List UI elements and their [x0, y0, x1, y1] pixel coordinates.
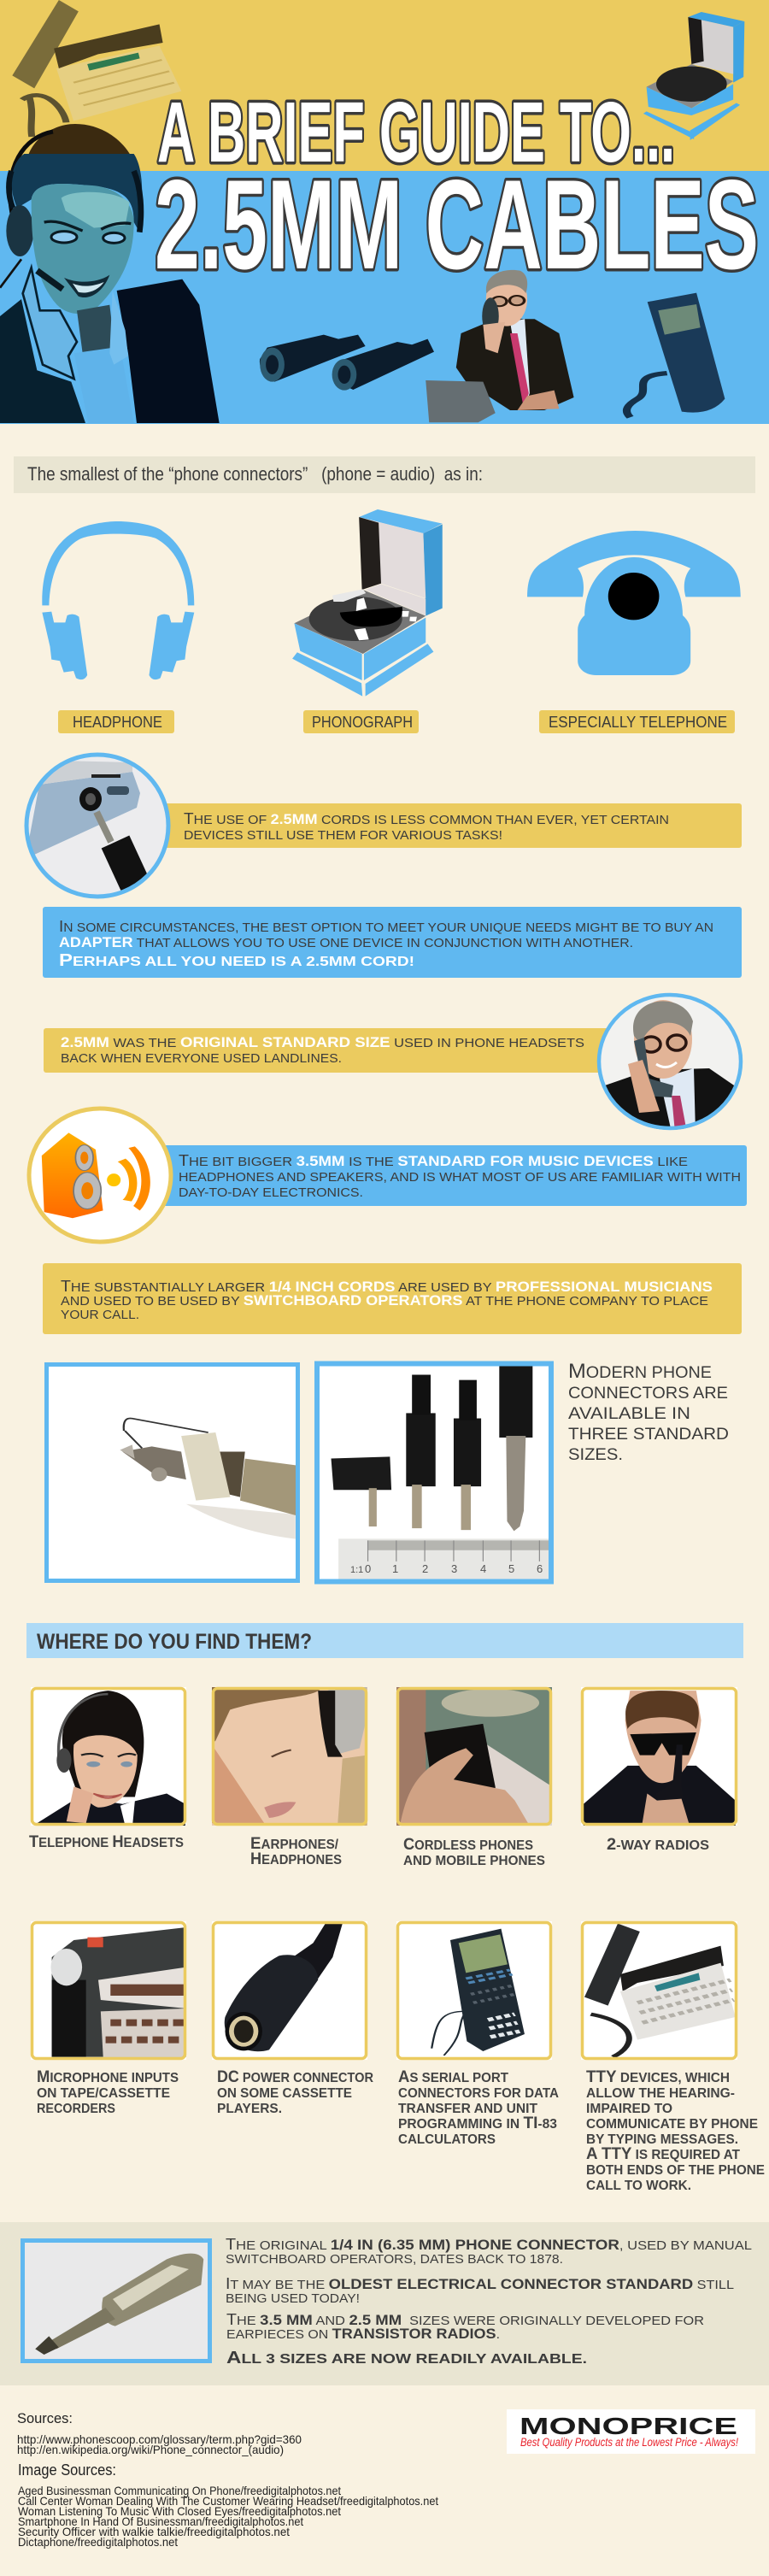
caption: cordless phones [403, 1836, 545, 1868]
card: 2-way radio [581, 1687, 737, 1826]
label: especially telephone: ESPECIALLY TELEPHONE [549, 714, 727, 731]
side text: CONNECTORS ARE [568, 1385, 728, 1403]
intro text: The smallest of the “phone connectors” (phone = audio) as in: [27, 463, 483, 485]
quarter inch line 3: YOUR CALL. [61, 1308, 139, 1322]
icon: headphone [42, 521, 194, 679]
cordless phone in header [626, 293, 725, 417]
history line 7: ALL 3 SIZES ARE NOW READILY AVAILABLE. [226, 2349, 587, 2367]
icon: TTY phone sepia [12, 0, 181, 137]
icon: speaker [29, 1109, 171, 1242]
intro bar background [14, 456, 755, 493]
caption: DC power: DC POWER CONNECTOR [217, 2068, 373, 2086]
caption: serial port: CALCULATORS [398, 2132, 496, 2147]
businessman in header [426, 270, 574, 422]
original standard bar [44, 1028, 612, 1073]
history line 5: THE 3.5 MM AND 2.5 MM SIZES WERE ORIGINALLY DEVELOPED FOR [226, 2311, 704, 2328]
label: especially telephone [539, 710, 735, 733]
ruler numbers: 6 [537, 1562, 543, 1575]
caption: microphone inputs: ON TAPE/CASSETTE [37, 2086, 170, 2101]
source url 1: http://www.phonescoop.com/glossary/term.php?gid=360 [17, 2432, 302, 2446]
caption: microphone inputs [37, 2068, 179, 2116]
adapter box [43, 907, 742, 978]
caption: DC power [217, 2068, 373, 2116]
callout bar [128, 803, 742, 848]
original standard line 1: 2.5MM WAS THE ORIGINAL STANDARD SIZE USED IN PHONE HEADSETS [61, 1034, 584, 1050]
heading: where do you find them: WHERE DO YOU FIND THEM? [37, 1630, 312, 1654]
ruler numbers: 4 [480, 1562, 486, 1575]
card: dictaphone [31, 1921, 186, 2060]
label: headphone [58, 710, 174, 733]
intro bar [14, 456, 755, 493]
caption: microphone inputs: RECORDERS [37, 2102, 115, 2116]
original standard line 2: BACK WHEN EVERYONE USED LANDLINES. [61, 1051, 342, 1066]
ruler numbers: 0 [365, 1562, 371, 1575]
adapter line 2: ADAPTER THAT ALLOWS YOU TO USE ONE DEVICE IN CONJUNCTION WITH ANOTHER. [59, 934, 633, 950]
image source lines: Call Center Woman Dealing With The Customer Wearing Headset/freedigitalphotos.net [18, 2494, 438, 2508]
photo: businessman [597, 993, 743, 1137]
caption: earphones: HEADPHONES [250, 1850, 342, 1868]
photo: jack in device [25, 753, 170, 898]
caption: cordless phones: AND MOBILE PHONES [403, 1854, 545, 1868]
caption: cordless phones: CORDLESS PHONES [403, 1836, 533, 1854]
caption: telephone headsets: TELEPHONE HEADSETS [29, 1833, 184, 1851]
image source lines: Security Officer with walkie talkie/freedigitalphotos.net [18, 2525, 290, 2538]
caption: TTY devices: ALLOW THE HEARING- [586, 2086, 735, 2101]
hair above the fold [26, 124, 137, 172]
callout: 3.5mm music [29, 1109, 747, 1242]
side text: THREE STANDARD [568, 1426, 729, 1444]
header woman with headset [0, 124, 220, 423]
quarter inch line 2: AND USED TO BE USED BY SWITCHBOARD OPERATORS AT THE PHONE COMPANY TO PLACE [61, 1292, 708, 1309]
image sources heading: Image Sources: [18, 2461, 116, 2479]
adapter line 3: PERHAPS ALL YOU NEED IS A 2.5MM CORD! [59, 951, 414, 970]
logo: Monoprice [507, 2409, 755, 2454]
ruler numbers: 2 [422, 1562, 428, 1575]
header blue band [0, 171, 769, 424]
photo: panel jack [44, 1362, 300, 1583]
caption: DC power: PLAYERS. [217, 2102, 282, 2116]
panel: history band [0, 2222, 769, 2385]
caption: TTY devices: A TTY IS REQUIRED AT [586, 2145, 741, 2163]
callout text line 2: DEVICES STILL USE THEM FOR VARIOUS TASKS! [184, 828, 502, 843]
caption: DC power: ON SOME CASSETTE [217, 2086, 352, 2101]
callout: 2.5mm less common [25, 753, 742, 898]
adapter line 1: IN SOME CIRCUMSTANCES, THE BEST OPTION TO MEET YOUR UNIQUE NEEDS MIGHT BE TO BUY AN [59, 918, 713, 935]
card: earphones [212, 1687, 367, 1826]
caption: TTY devices: CALL TO WORK. [586, 2179, 691, 2193]
quarter inch line 1: THE SUBSTANTIALLY LARGER 1/4 INCH CORDS ARE USED BY PROFESSIONAL MUSICIANS [61, 1278, 713, 1295]
history line 6: EARPIECES ON TRANSISTOR RADIOS . [226, 2326, 500, 2342]
sources [17, 2410, 438, 2549]
logo: Monoprice: MONOPRICE [520, 2413, 737, 2439]
side text: AVAILABLE IN [568, 1405, 690, 1423]
label: headphone: HEADPHONE [73, 714, 162, 731]
heading: where do you find them [26, 1623, 743, 1658]
caption: serial port: TRANSFER AND UNIT [398, 2102, 538, 2116]
label: phonograph [303, 710, 419, 733]
image source lines: Dictaphone/freedigitalphotos.net [18, 2535, 178, 2549]
header banner [0, 0, 769, 424]
3.5mm line 3: DAY-TO-DAY ELECTRONICS. [179, 1185, 363, 1200]
photo: three plug sizes with ruler [314, 1362, 554, 1584]
image source lines [18, 2484, 438, 2549]
ruler numbers: 5 [508, 1562, 514, 1575]
side text: MODERN PHONE [568, 1360, 712, 1383]
3.5mm bar [162, 1145, 747, 1206]
card: telephone headsets [31, 1687, 186, 1826]
icon: telephone [527, 531, 741, 675]
history background [0, 2222, 769, 2385]
panel: connector photos [44, 1360, 729, 1584]
caption: TTY devices: TTY DEVICES, WHICH [586, 2068, 730, 2086]
caption: earphones: EARPHONES/ [250, 1835, 339, 1853]
ruler numbers: 3 [451, 1562, 457, 1575]
icon: phonograph [292, 509, 443, 697]
label: phonograph: PHONOGRAPH [312, 714, 413, 731]
header yellow band [0, 0, 769, 171]
card: DC power connector [212, 1921, 367, 2060]
caption: serial port: AS SERIAL PORT [398, 2068, 509, 2086]
image source lines: Smartphone In Hand Of Businessman/freedigitalphotos.net [18, 2514, 303, 2528]
ruler numbers [350, 1562, 543, 1575]
image source lines: Woman Listening To Music With Closed Eyes/freedigitalphotos.net [18, 2504, 341, 2518]
quarter inch box [43, 1263, 742, 1334]
3.5mm line 2: HEADPHONES AND SPEAKERS, AND IS WHAT MOST OF US ARE FAMILIAR WITH WITH [179, 1170, 741, 1185]
icon: phonograph in header [645, 12, 744, 136]
caption: serial port: PROGRAMMING IN TI-83 [398, 2114, 557, 2132]
image source lines: Aged Businessman Communicating On Phone/freedigitalphotos.net [18, 2484, 341, 2497]
caption: earphones [250, 1835, 342, 1868]
3.5mm line 1: THE BIT BIGGER 3.5MM IS THE STANDARD FOR MUSIC DEVICES LIKE [179, 1152, 688, 1169]
caption: TTY devices: BY TYPING MESSAGES. [586, 2132, 738, 2147]
history line 2: SWITCHBOARD OPERATORS, DATES BACK TO 1878. [226, 2252, 563, 2267]
ruler numbers: 1:1 [350, 1565, 363, 1575]
source url 2: http://en.wikipedia.org/wiki/Phone_connector_(audio) [17, 2443, 284, 2456]
panel: three icons [42, 509, 741, 733]
ruler numbers: 1 [392, 1562, 398, 1575]
callout: quarter inch [43, 1263, 742, 1334]
caption: serial port [398, 2068, 559, 2147]
sources heading: Sources: [17, 2410, 73, 2426]
history line 1: THE ORIGINAL 1/4 IN (6.35 MM) PHONE CONNECTOR , USED BY MANUAL [226, 2236, 752, 2253]
card: TTY device [581, 1921, 737, 2060]
callout: adapter [43, 907, 742, 978]
caption: microphone inputs: MICROPHONE INPUTS [37, 2068, 179, 2086]
caption: TTY devices: BOTH ENDS OF THE PHONE [586, 2163, 765, 2178]
photo: quarter-inch plug [21, 2238, 212, 2363]
caption: TTY devices: IMPAIRED TO [586, 2102, 672, 2116]
callout text line 1: THE USE OF 2.5MM CORDS IS LESS COMMON THAN EVER, YET CERTAIN [184, 810, 669, 827]
card: mobile phone [396, 1687, 552, 1826]
side text [568, 1360, 729, 1464]
callout: original standard [44, 993, 743, 1137]
history line 4: BEING USED TODAY! [226, 2291, 360, 2306]
caption: TTY devices: COMMUNICATE BY PHONE [586, 2117, 758, 2132]
history line 3: IT MAY BE THE OLDEST ELECTRICAL CONNECTOR STANDARD STILL [226, 2275, 734, 2292]
caption: serial port: CONNECTORS FOR DATA [398, 2086, 559, 2101]
side text: SIZES. [568, 1446, 623, 1464]
connectors in header [260, 335, 434, 391]
caption: 2-way radios: 2-WAY RADIOS [607, 1836, 709, 1854]
caption: TTY devices [586, 2068, 765, 2193]
card: TI-83 calculator [396, 1921, 552, 2060]
